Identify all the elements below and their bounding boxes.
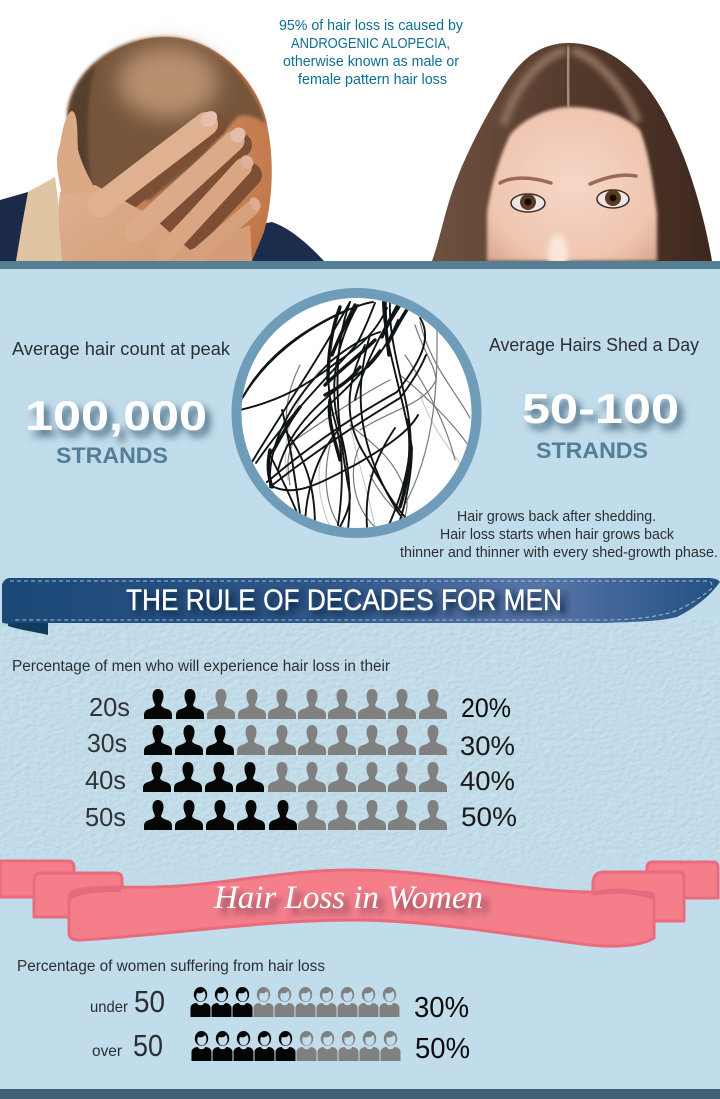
ribbon: hair loss in women: Hair Loss in Women: [213, 880, 483, 916]
dark strands: [240, 300, 426, 529]
header caption: [279, 18, 464, 88]
hair strands circle: [236, 293, 476, 533]
row: 30s 30%: [87, 725, 515, 761]
header caption: otherwise known as male or: [283, 54, 459, 70]
row: 20s 20%: 20%: [461, 693, 511, 723]
left stat: average hair count: STRANDS: [56, 443, 168, 468]
right stat: hairs shed per day: Average Hairs Shed a Day: [489, 335, 699, 355]
header caption: 95% of hair loss is caused by: [279, 18, 464, 34]
left stat: average hair count: 100,000: [25, 392, 207, 439]
faint wisps: [285, 370, 465, 527]
row: under 50 30%: 50: [134, 984, 165, 1019]
men intro text: Percentage of men who will experience hair loss in their: [12, 658, 390, 675]
header caption: ANDROGENIC ALOPECIA,: [291, 36, 450, 52]
eyes: [511, 194, 545, 212]
row: under 50 30%: 30%: [414, 992, 469, 1024]
women intro text: Percentage of women suffering from hair loss: [17, 958, 325, 975]
row: 30s 30%: 30s: [87, 728, 127, 758]
row: 50s 50%: 50%: [461, 802, 517, 832]
row: 50s 50%: [85, 800, 517, 832]
right stat: hairs shed per day: STRANDS: [536, 438, 648, 463]
row: under 50 30%: [90, 984, 469, 1024]
nose highlight: [548, 234, 568, 274]
row: 30s 30%: 30%: [460, 731, 515, 761]
row: 40s 40%: 40%: [460, 766, 515, 796]
row: 20s 20%: 20s: [89, 692, 130, 722]
left stat: average hair count: Average hair count at peak: [12, 339, 231, 359]
photo: woman with thinning part: [432, 43, 712, 274]
icon: hand: [57, 108, 263, 262]
left stat: average hair count: [12, 339, 231, 468]
footer band: [0, 1089, 720, 1099]
photo: man holding balding head: [0, 37, 324, 262]
shedding explanation: [400, 509, 718, 561]
row: 20s 20%: [89, 689, 511, 723]
grey strands: [286, 322, 470, 527]
thick root cluster: [268, 302, 410, 507]
shedding explanation: thinner and thinner with every shed-growth phase.: [400, 545, 718, 561]
pictogram chart: men by decade: [85, 689, 517, 832]
right stat: hairs shed per day: 50-100: [522, 385, 679, 432]
header photo strip: [0, 0, 720, 274]
header caption: female pattern hair loss: [298, 72, 447, 88]
row: under 50 30%: under: [90, 999, 129, 1016]
row: 50s 50%: 50s: [85, 802, 126, 832]
shedding explanation: Hair grows back after shedding.: [457, 509, 656, 525]
header divider band: [0, 261, 720, 269]
row: over 50 50%: [92, 1028, 470, 1065]
row: over 50 50%: over: [92, 1043, 123, 1060]
row: over 50 50%: 50%: [415, 1033, 470, 1065]
shedding explanation: Hair loss starts when hair grows back: [440, 527, 675, 543]
row: over 50 50%: 50: [133, 1028, 163, 1063]
right stat: hairs shed per day: [489, 335, 699, 463]
ribbon: hair loss in women: [0, 861, 718, 946]
banner: the rule of decades for men: THE RULE OF DECADES FOR MEN: [126, 584, 562, 617]
eyebrows: [500, 175, 636, 184]
row: 40s 40%: 40s: [85, 765, 126, 795]
paper texture background: [0, 620, 720, 905]
row: 40s 40%: [85, 762, 515, 796]
pictogram chart: women by age: [90, 984, 470, 1065]
banner: the rule of decades for men: [2, 578, 720, 635]
